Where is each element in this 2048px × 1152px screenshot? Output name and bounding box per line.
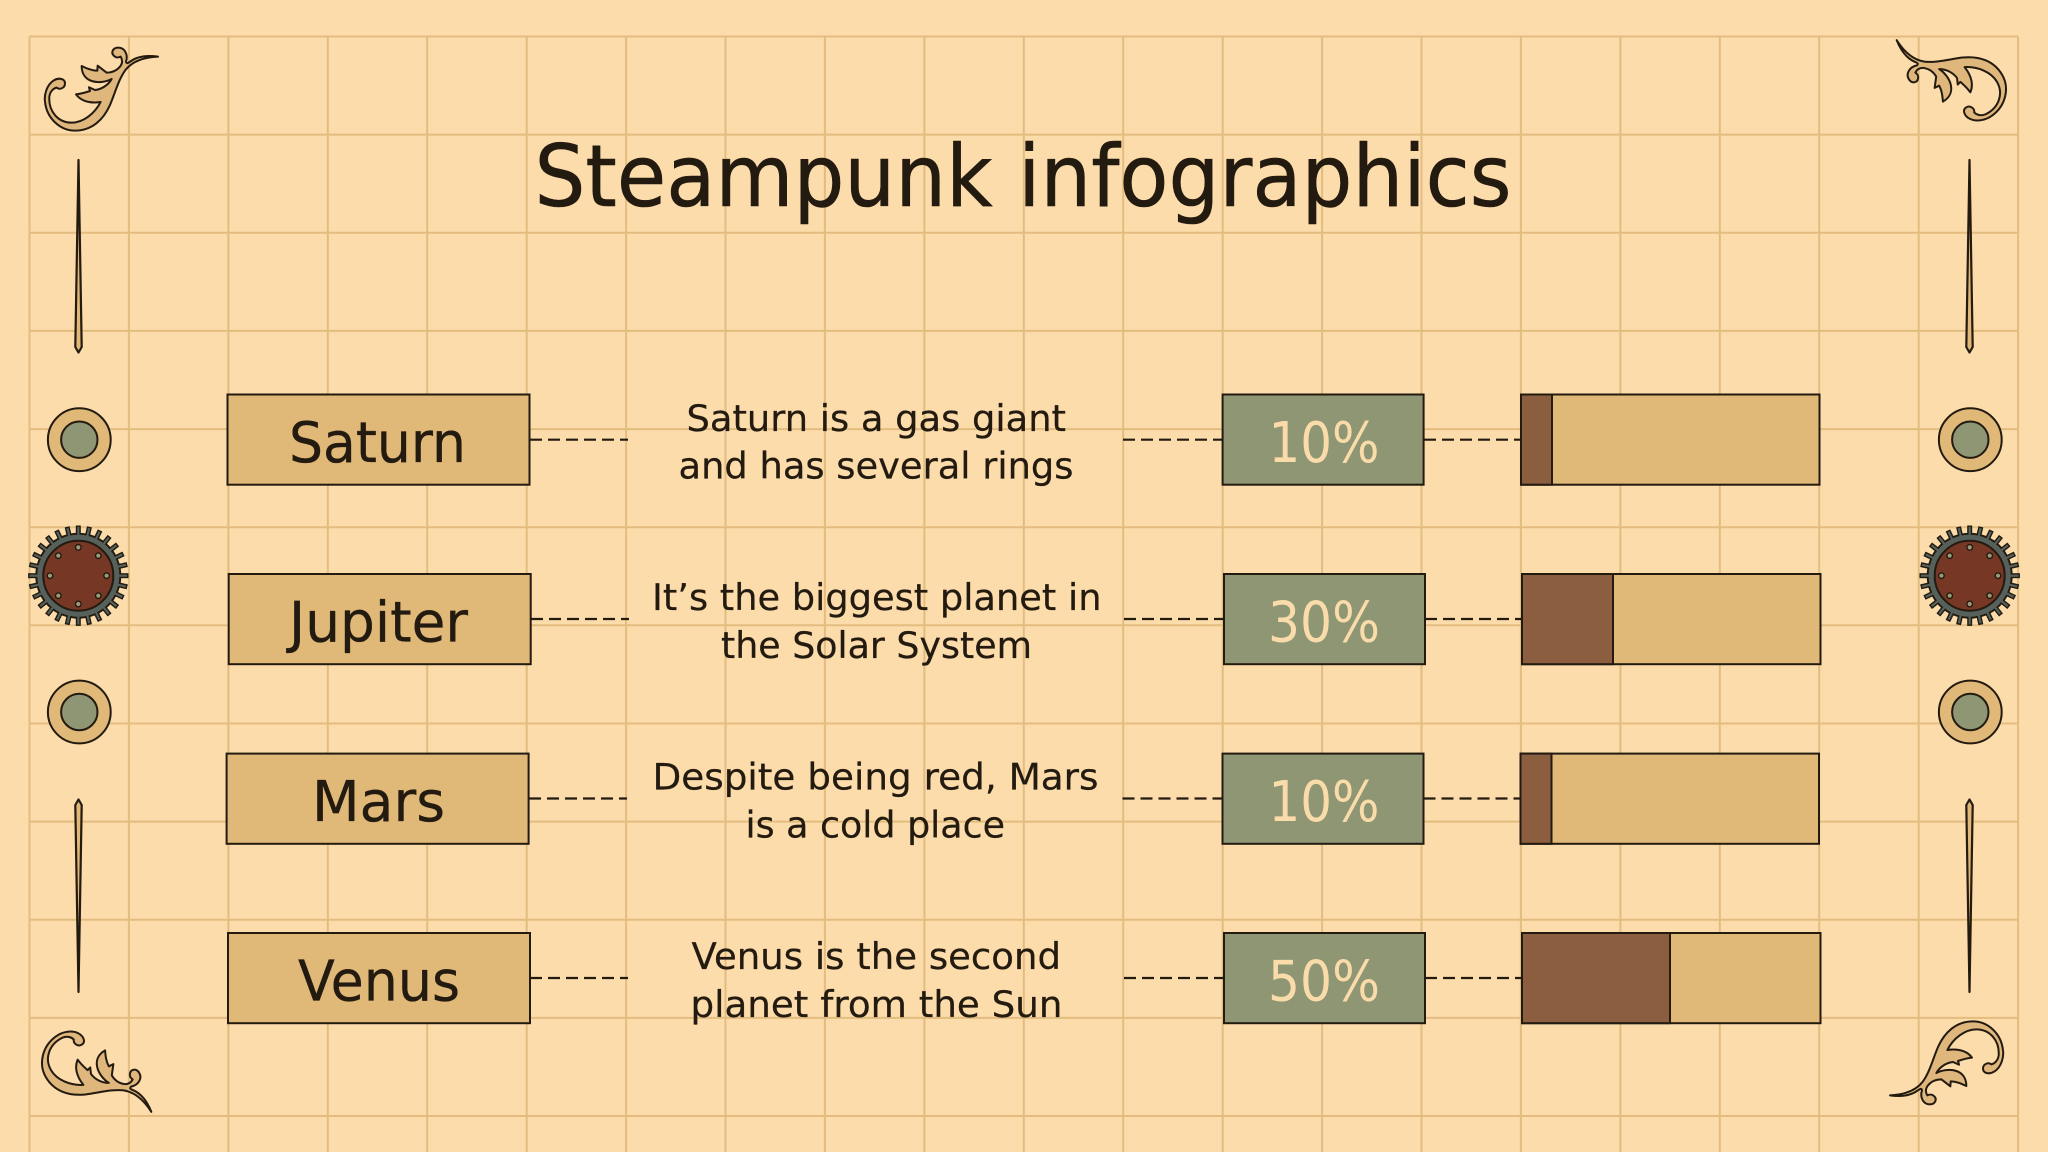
connectors	[529, 797, 1520, 800]
progress bar: Mars 10%	[1520, 754, 1819, 844]
percentage box: 30%	[1224, 574, 1425, 664]
icon: ornament bottom right	[1890, 1021, 2003, 1104]
icon: gear left	[29, 526, 128, 625]
icon: needle top left	[75, 160, 82, 352]
row: Saturn	[228, 394, 1820, 488]
icon: rivet lower left	[48, 681, 111, 743]
description: Saturn: and has several rings	[678, 444, 1074, 488]
icon: needle bottom right	[1966, 800, 1973, 992]
icon: needle bottom left	[75, 800, 82, 992]
row: Mars	[227, 754, 1819, 846]
label text: Venus: Venus	[298, 950, 460, 1015]
progress bar: Saturn 10%	[1521, 394, 1820, 485]
description: Jupiter: It’s the biggest planet in	[652, 576, 1102, 619]
percentage text: 30%: 30%	[1268, 591, 1380, 656]
icon: ornament top right	[1889, 3, 2017, 143]
connectors	[531, 618, 1522, 620]
row: Venus	[228, 933, 1820, 1026]
connectors	[530, 977, 1522, 979]
left column decorations	[29, 160, 128, 992]
label box: Jupiter	[229, 574, 531, 664]
percentage text: 50%: 50%	[1268, 950, 1380, 1015]
icon: ornament bottom left	[31, 1009, 159, 1149]
description: Mars: Despite being red, Mars	[652, 756, 1098, 798]
label box: Venus	[228, 933, 530, 1023]
label text: Mars: Mars	[312, 770, 445, 835]
row: Jupiter	[229, 574, 1821, 667]
label text: Jupiter: Jupiter	[286, 591, 469, 656]
label box: Mars	[227, 754, 529, 844]
description: Saturn: Saturn is a gas giant	[686, 397, 1066, 440]
description: Venus: Venus is the second	[692, 935, 1061, 978]
icon: rivet upper left	[48, 408, 111, 471]
right column decorations	[1920, 160, 2019, 992]
percentage text: 10%: 10%	[1268, 770, 1380, 835]
description: Jupiter: the Solar System	[721, 624, 1032, 667]
label text: Saturn: Saturn	[289, 411, 466, 476]
progress bar: Venus 50%	[1522, 933, 1820, 1023]
connectors	[530, 439, 1521, 441]
icon: needle top right	[1966, 160, 1973, 352]
icon: rivet upper right	[1939, 408, 2002, 471]
percentage box: 10%	[1222, 754, 1424, 844]
title: Steampunk infographics	[534, 127, 1512, 227]
progress bar: Jupiter 30%	[1522, 574, 1820, 664]
icon: rivet lower right	[1939, 681, 2002, 743]
percentage box: 10%	[1223, 394, 1424, 485]
percentage box: 50%	[1224, 933, 1425, 1023]
percentage text: 10%: 10%	[1268, 411, 1380, 476]
icon: ornament top left	[45, 48, 158, 131]
icon: gear right	[1920, 526, 2019, 625]
description: Mars: is a cold place	[746, 804, 1005, 846]
label box: Saturn	[228, 394, 530, 485]
description: Venus: planet from the Sun	[690, 983, 1062, 1026]
